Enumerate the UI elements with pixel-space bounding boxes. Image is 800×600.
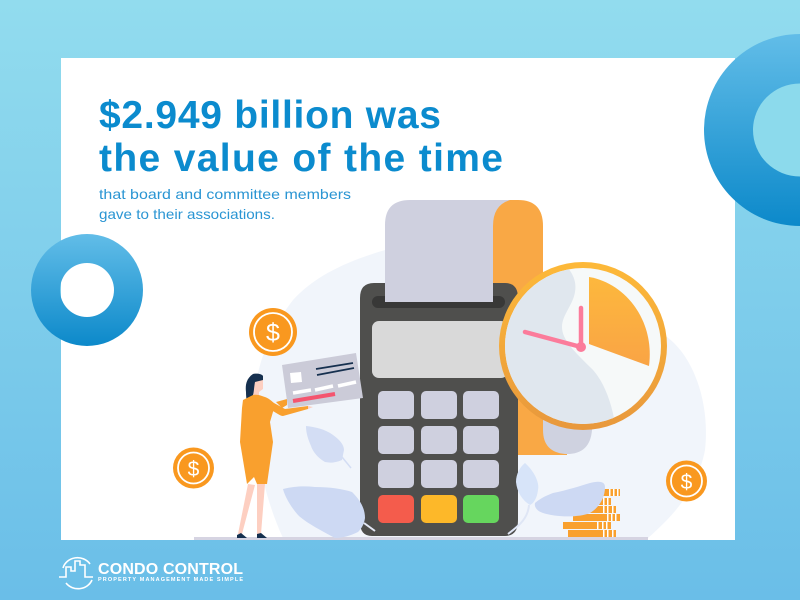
coin stack <box>563 489 620 537</box>
clock face <box>505 268 661 424</box>
coin icon: left <box>173 448 214 488</box>
coin icon: left: $ <box>188 458 200 481</box>
orange wedge <box>589 277 650 366</box>
clock hands <box>525 308 581 347</box>
card chip <box>290 372 302 383</box>
card number <box>293 382 356 393</box>
receipt paper <box>385 200 510 302</box>
card stripe <box>293 394 335 401</box>
far arm <box>276 399 287 408</box>
near arm <box>270 400 308 416</box>
ground line <box>194 537 648 540</box>
logo: Condo Control <box>59 558 243 589</box>
heading: $2.949 billion was <box>99 94 441 137</box>
hair <box>246 374 263 407</box>
logo icon <box>59 558 93 589</box>
grey roll end <box>543 415 592 454</box>
woman <box>237 374 313 538</box>
leaves: left <box>283 426 375 538</box>
coin icon: top <box>249 308 297 356</box>
clock ring <box>499 262 667 430</box>
yellow key <box>421 495 457 523</box>
display <box>372 321 508 378</box>
logo tagline: PROPERTY MANAGEMENT MADE SIMPLE <box>98 577 243 583</box>
green key <box>463 495 499 523</box>
ring: top right <box>704 34 800 226</box>
terminal body <box>360 283 518 536</box>
credit card <box>282 353 363 408</box>
ring hole: top right <box>753 84 800 176</box>
face <box>252 380 263 397</box>
logo name: CONDO CONTROL <box>98 561 243 578</box>
clock centre <box>576 342 586 352</box>
subheading: gave to their associations. <box>99 206 275 222</box>
subheading <box>99 186 351 222</box>
background blob <box>253 250 706 538</box>
white panel <box>61 58 735 540</box>
hand <box>308 406 313 409</box>
coin icon: right: $ <box>681 471 693 494</box>
shoes <box>237 533 267 538</box>
face shading <box>505 269 614 424</box>
paper slot <box>372 296 505 308</box>
red key <box>378 495 414 523</box>
card lines <box>316 363 354 375</box>
leaves: right <box>508 463 605 534</box>
heading <box>99 94 503 180</box>
orange paper roll <box>490 200 567 455</box>
legs <box>238 484 265 534</box>
coin icon: top: $ <box>266 319 280 347</box>
subheading: that board and committee members <box>99 186 351 202</box>
heading: the value of the time <box>99 137 503 180</box>
ring: left <box>31 234 143 346</box>
keypad <box>378 391 499 488</box>
orange dress <box>240 395 275 484</box>
payment terminal <box>360 200 518 536</box>
coin icon: right <box>666 460 707 502</box>
clock <box>490 262 667 430</box>
